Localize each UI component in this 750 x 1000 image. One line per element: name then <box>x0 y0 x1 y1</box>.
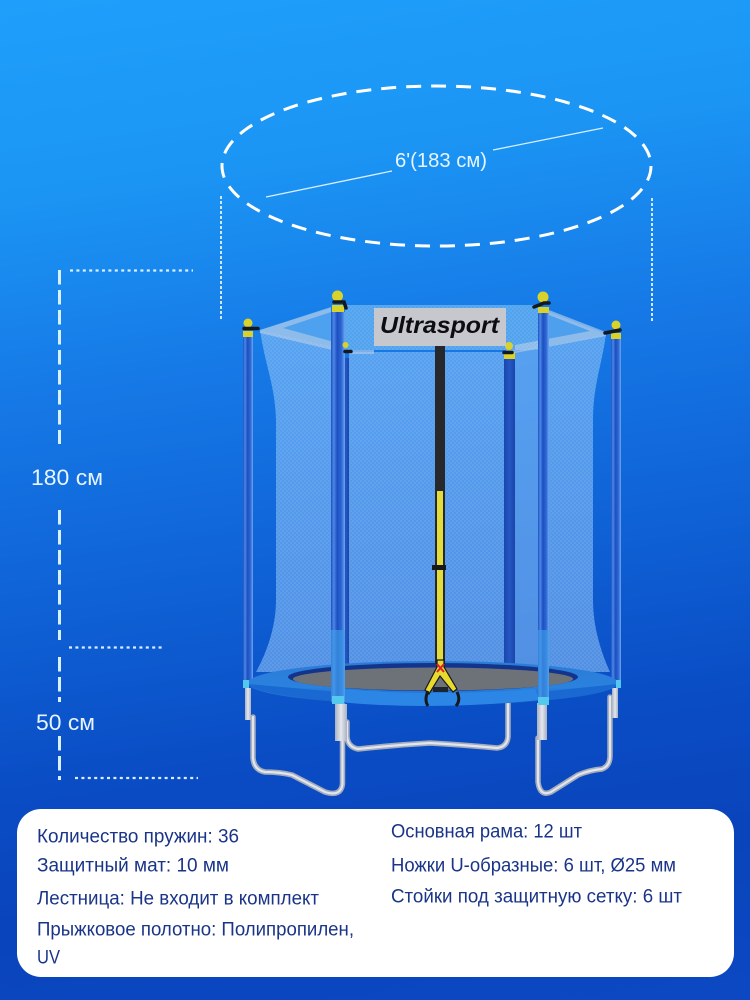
left column specs: UV <box>37 948 60 968</box>
left column specs: Количество пружин: 36 <box>37 826 239 848</box>
leg sleeves <box>245 688 618 741</box>
back poles <box>343 358 515 668</box>
trampoline <box>243 290 621 793</box>
height dimension lines <box>60 270 198 780</box>
logo banner <box>374 308 506 346</box>
logo banner: Ultrasport <box>380 312 500 338</box>
safety net <box>256 305 610 672</box>
right column specs <box>391 822 682 908</box>
center strap <box>425 346 459 706</box>
left column specs: Защитный мат: 10 мм <box>37 856 229 876</box>
left column specs: Лестница: Не входит в комплект <box>37 888 319 910</box>
diameter label: 6'(183 см) <box>395 150 487 172</box>
left column specs <box>37 826 354 968</box>
label: leg height: 50 см <box>36 710 95 735</box>
pole caps <box>243 290 621 359</box>
vertical guide lines for diameter <box>221 196 652 322</box>
right column specs: Основная рама: 12 шт <box>391 822 582 842</box>
specification card <box>17 809 734 977</box>
label: total height: 180 см <box>31 465 103 490</box>
steel legs <box>253 697 610 793</box>
left column specs: Прыжковое полотно: Полипропилен, <box>37 920 354 940</box>
right column specs: Стойки под защитную сетку: 6 шт <box>391 886 682 908</box>
right column specs: Ножки U-образные: 6 шт, Ø25 мм <box>391 856 676 876</box>
front poles <box>243 312 621 705</box>
diameter ellipse <box>222 86 651 246</box>
outer poles <box>243 337 621 684</box>
frame ring and mat <box>248 661 618 706</box>
